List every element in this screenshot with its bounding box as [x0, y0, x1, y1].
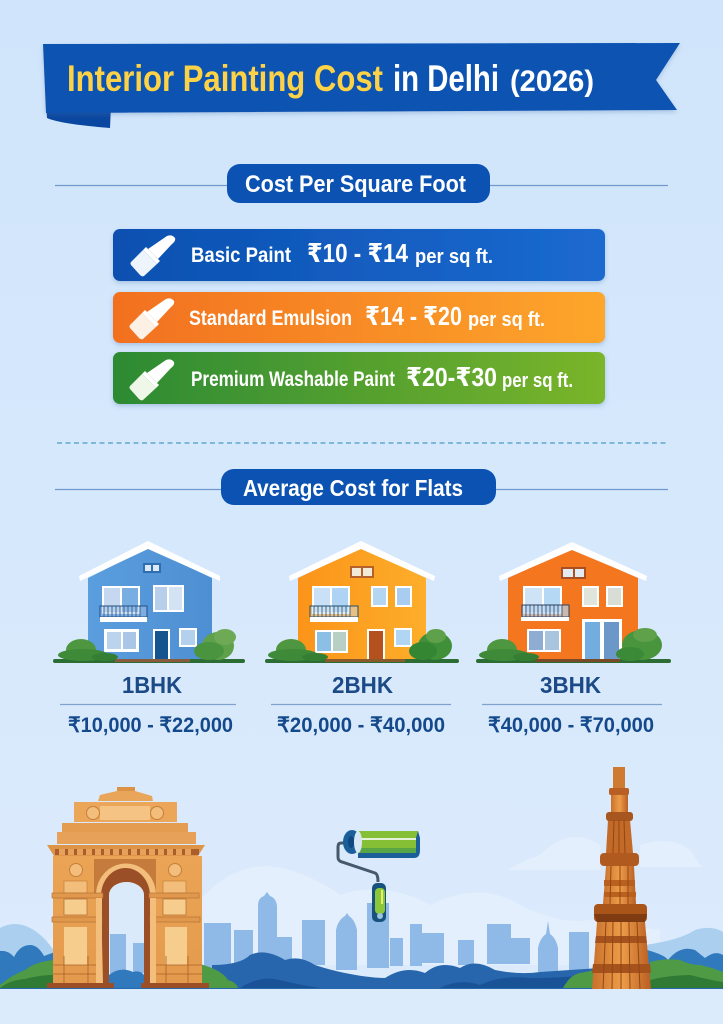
section heading: average cost for flats: Average Cost for Flats	[243, 475, 463, 501]
panel: premium washable paint: Premium Washable Paint	[191, 368, 395, 391]
house card: 1BHK	[53, 541, 245, 737]
icon: paint roller	[338, 830, 420, 922]
price: ₹40,000 - ₹70,000	[488, 714, 654, 737]
label: 2BHK	[332, 672, 393, 698]
panel: standard emulsion	[113, 292, 605, 343]
icon: paint brush	[130, 359, 174, 400]
title text: in Delhi (2026)	[393, 58, 594, 99]
label: 1BHK	[122, 672, 182, 698]
greenery	[0, 959, 723, 988]
tree line	[0, 945, 723, 988]
section heading: average cost for flats	[55, 469, 668, 505]
scene: Delhi skyline	[0, 837, 723, 988]
panel: basic paint: ₹10 - ₹14	[307, 238, 408, 268]
illustration: blue house	[53, 541, 245, 663]
section heading: cost per square foot: Cost Per Square Foot	[245, 171, 466, 198]
illustration: orange house	[476, 542, 671, 663]
landmark: India Gate	[47, 787, 209, 988]
illustration: amber house	[265, 541, 459, 663]
section heading: cost per square foot	[55, 164, 668, 203]
bushes and ground	[265, 629, 459, 663]
panel: standard emulsion: ₹14 - ₹20	[365, 301, 462, 331]
title banner	[43, 43, 680, 128]
panel: basic paint: per sq ft.	[415, 246, 493, 268]
icon: paint brush	[130, 235, 175, 276]
panel: basic paint: Basic Paint	[191, 244, 291, 267]
pale hills	[0, 924, 723, 965]
panel: premium washable paint: per sq ft.	[502, 370, 573, 392]
bushes and ground	[476, 628, 671, 663]
landmark: Qutb Minar	[592, 767, 651, 989]
price: ₹10,000 - ₹22,000	[68, 714, 233, 737]
title text: Interior Painting Cost	[67, 58, 383, 99]
panel: standard emulsion: per sq ft.	[468, 309, 545, 331]
price: ₹20,000 - ₹40,000	[277, 714, 445, 737]
panel: premium washable paint	[113, 352, 605, 404]
title text: in Delhi (2026): (2026)	[510, 65, 594, 98]
house card: 3BHK	[476, 542, 671, 737]
panel: premium washable paint: ₹20-₹30	[406, 362, 497, 392]
buildings	[110, 892, 589, 974]
panel: standard emulsion: Standard Emulsion	[189, 307, 352, 330]
clouds	[36, 837, 702, 965]
house card: 2BHK	[265, 541, 459, 737]
icon: paint brush	[130, 298, 174, 339]
ground line	[0, 988, 723, 990]
panel: basic paint	[113, 229, 605, 281]
title text: in Delhi (2026): in Delhi	[393, 58, 499, 99]
bushes and ground	[53, 629, 245, 663]
label: 3BHK	[540, 672, 601, 698]
